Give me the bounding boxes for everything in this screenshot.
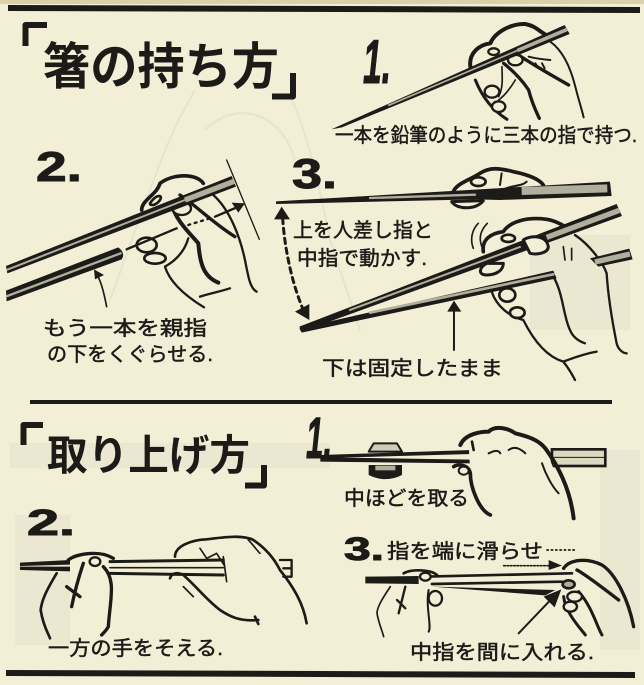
illustration: picking up chopsticks from the rest at the middle xyxy=(320,428,605,518)
pick-up step 1 number: 1. xyxy=(306,406,332,471)
caption: step 2 xyxy=(43,317,213,366)
caption: upper chopstick moves: 上を人差し指と xyxy=(293,219,433,242)
caption: step 2: の下をくぐらせる. xyxy=(47,344,213,366)
caption: lower chopstick stays fixed: 下は固定したまま xyxy=(322,357,503,380)
title: how to pick up chopsticks xyxy=(24,425,264,486)
caption: upper chopstick moves: 中指で動かす. xyxy=(297,247,427,270)
step 3 number: 3. xyxy=(292,150,337,197)
illustration: sliding fingers and inserting the middle finger xyxy=(365,550,634,637)
rule: top xyxy=(8,8,640,10)
caption: pick-up step 1: 中ほどを取る xyxy=(344,487,469,510)
caption: pick-up step 2: 一方の手をそえる. xyxy=(48,637,223,660)
pick-up step 3 number: 3. xyxy=(344,531,384,567)
title: how to pick up chopsticks: 取り上げ方 xyxy=(47,432,250,479)
illustration: moving the upper chopstick with index and middle fingers xyxy=(274,169,633,380)
illustration: hand holding one chopstick like a pencil xyxy=(331,24,584,129)
step 2 number: 2. xyxy=(36,143,82,190)
illustration: second chopstick slid under the thumb xyxy=(6,160,259,307)
illustration: supporting with the other hand xyxy=(20,537,307,638)
pick-up step 2 number: 2. xyxy=(27,502,75,543)
caption: insert middle finger between: 中指を間に入れる. xyxy=(410,641,594,664)
title: how to hold chopsticks: 箸の持ち方 xyxy=(43,39,279,95)
caption: upper chopstick moves xyxy=(293,219,433,270)
caption: step 2: もう一本を親指 xyxy=(43,317,207,340)
caption: slide fingers to the end: 指を端に滑らせ xyxy=(387,540,543,563)
rule: bottom xyxy=(6,673,635,675)
rule: middle xyxy=(30,400,612,404)
step 1 number: 1. xyxy=(363,28,391,97)
